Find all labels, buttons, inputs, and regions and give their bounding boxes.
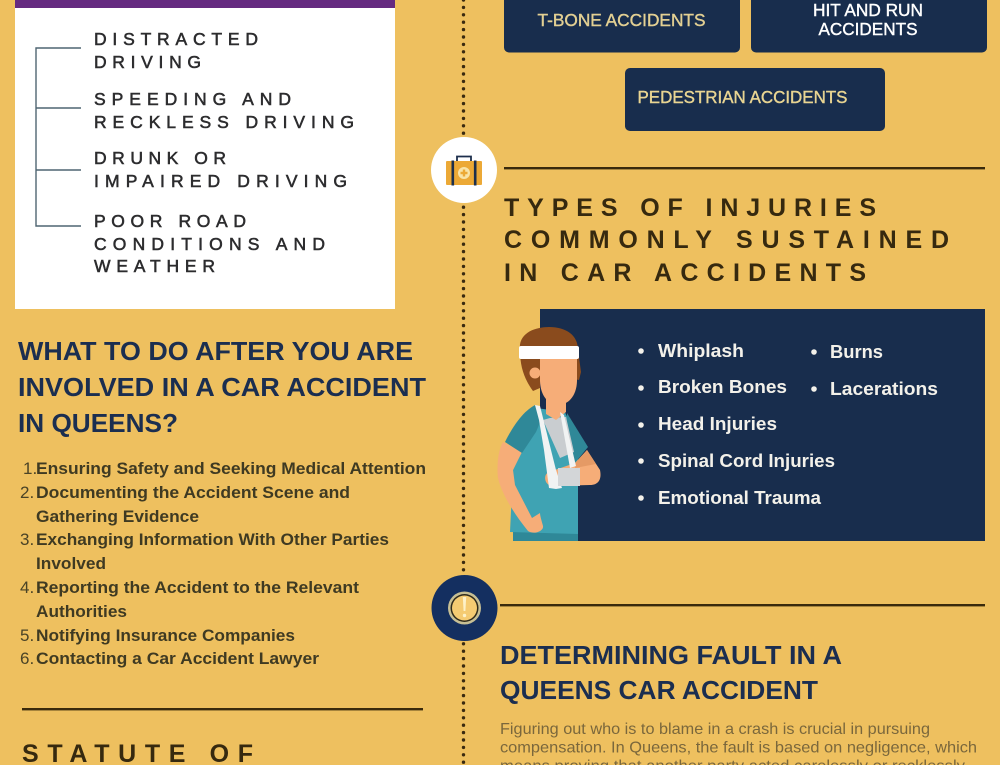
heading: types of injuries bbox=[504, 194, 949, 287]
cause: poor road conditions: CONDITIONS AND bbox=[94, 234, 325, 254]
heading: what to do after an accident: INVOLVED IN A CAR ACCIDENT bbox=[18, 374, 426, 402]
button: pedestrian accidents bbox=[625, 68, 885, 131]
cause: poor road conditions: WEATHER bbox=[94, 256, 215, 276]
paragraph: determining fault bbox=[500, 721, 977, 765]
numbered list of steps: Contacting a Car Accident Lawyer bbox=[36, 649, 319, 668]
numbered list of steps: 5. bbox=[20, 626, 34, 645]
heading: determining fault: DETERMINING FAULT IN A bbox=[500, 642, 842, 670]
numbered list of steps: 1. bbox=[23, 459, 37, 478]
panel header bar bbox=[15, 0, 395, 8]
paragraph: determining fault: Figuring out who is to blame in a crash is crucial in pursuing bbox=[500, 721, 930, 738]
chest gap and neck bbox=[543, 417, 574, 458]
heading: what to do after an accident: IN QUEENS? bbox=[18, 410, 178, 438]
numbered list of steps: Authorities bbox=[36, 602, 127, 621]
heading: types of injuries: IN CAR ACCIDENTS bbox=[504, 259, 866, 287]
ear bbox=[530, 368, 540, 378]
face bbox=[540, 350, 577, 405]
button: hit and run accidents bbox=[751, 0, 987, 52]
injuries column one: Spinal Cord Injuries bbox=[658, 450, 835, 471]
hair bbox=[520, 327, 581, 391]
heading: determining fault bbox=[500, 642, 842, 705]
icon: first aid briefcase bbox=[431, 137, 497, 203]
heading: types of injuries: TYPES OF INJURIES bbox=[504, 194, 876, 222]
panel: injuries list bbox=[540, 309, 985, 541]
button: hit and run accidents: ACCIDENTS bbox=[818, 19, 918, 39]
cause: poor road conditions: POOR ROAD bbox=[94, 211, 246, 231]
numbered list of steps: 4. bbox=[20, 578, 34, 597]
arm in sling bbox=[545, 450, 601, 486]
injuries column one bbox=[658, 340, 835, 508]
numbered list of steps: Reporting the Accident to the Relevant bbox=[36, 578, 359, 597]
cause: drunk driving bbox=[94, 148, 347, 191]
arm cast bbox=[558, 468, 580, 486]
right sleeve bbox=[566, 413, 588, 463]
section rule: injuries bbox=[504, 167, 985, 169]
numbered list of steps: 3. bbox=[20, 530, 34, 549]
cause: speeding: RECKLESS DRIVING bbox=[94, 112, 354, 132]
injuries column two: Lacerations bbox=[830, 378, 938, 399]
cause: speeding bbox=[94, 89, 354, 132]
panel body bbox=[15, 8, 395, 309]
numbered list of steps: Notifying Insurance Companies bbox=[36, 626, 295, 645]
heading: what to do after an accident: WHAT TO DO AFTER YOU ARE bbox=[18, 338, 413, 366]
injuries column two bbox=[830, 341, 938, 399]
injuries column one: Head Injuries bbox=[658, 413, 777, 434]
head bandage bbox=[519, 346, 579, 359]
numbered list of steps: Ensuring Safety and Seeking Medical Attention bbox=[36, 459, 426, 478]
far arm bbox=[498, 442, 543, 533]
numbered list of steps bbox=[20, 459, 426, 668]
heading: types of injuries: COMMONLY SUSTAINED bbox=[504, 226, 949, 254]
numbered list of steps: 2. bbox=[20, 483, 34, 502]
left sleeve bbox=[505, 405, 541, 453]
injuries column one: Emotional Trauma bbox=[658, 487, 822, 508]
cause: distracted driving: DRIVING bbox=[94, 52, 201, 72]
timeline dotted line bbox=[462, 0, 465, 765]
numbered list of steps: 6. bbox=[20, 649, 34, 668]
illustration: injured man with sling bbox=[498, 327, 601, 541]
paragraph: determining fault: compensation. In Queens, the fault is based on negligence, which bbox=[500, 740, 977, 756]
bracket connector bbox=[36, 48, 81, 226]
numbered list of steps: Gathering Evidence bbox=[36, 507, 199, 526]
button: t-bone accidents: T-BONE ACCIDENTS bbox=[538, 10, 706, 30]
button: hit and run accidents: HIT AND RUN bbox=[813, 0, 923, 20]
heading: determining fault: QUEENS CAR ACCIDENT bbox=[500, 677, 818, 705]
button: t-bone accidents bbox=[504, 0, 740, 52]
injuries column one: Whiplash bbox=[658, 340, 744, 361]
bullets bbox=[638, 348, 817, 501]
cause: drunk driving: IMPAIRED DRIVING bbox=[94, 171, 347, 191]
icon: warning exclamation bbox=[432, 575, 498, 641]
numbered list of steps: Exchanging Information With Other Parties bbox=[36, 530, 389, 549]
section rule: fault bbox=[500, 604, 985, 606]
cause: poor road conditions bbox=[94, 211, 325, 276]
heading: what to do after an accident bbox=[18, 338, 426, 438]
cause: distracted driving: DISTRACTED bbox=[94, 29, 258, 49]
numbered list of steps: Involved bbox=[36, 554, 106, 573]
cause: distracted driving bbox=[94, 29, 258, 72]
numbered list of steps: Documenting the Accident Scene and bbox=[36, 483, 350, 502]
injuries column one: Broken Bones bbox=[658, 376, 787, 397]
injuries column two: Burns bbox=[830, 341, 883, 362]
cause: speeding: SPEEDING AND bbox=[94, 89, 291, 109]
panel: common causes bbox=[15, 0, 395, 309]
shirt bottom band bbox=[513, 530, 578, 541]
sling straps bbox=[535, 405, 562, 489]
shirt body bbox=[510, 408, 578, 534]
cause: drunk driving: DRUNK OR bbox=[94, 148, 226, 168]
button: pedestrian accidents: PEDESTRIAN ACCIDENTS bbox=[638, 87, 848, 107]
